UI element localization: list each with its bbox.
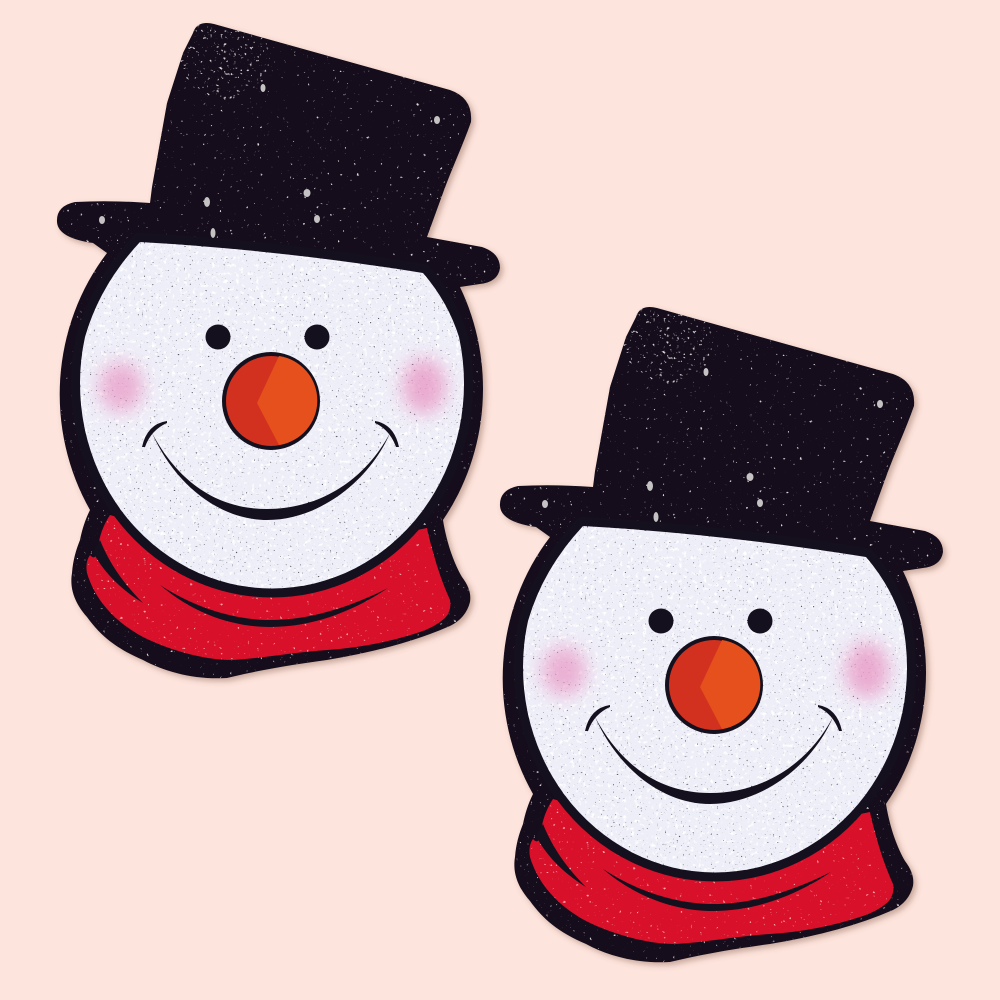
nose [222, 352, 320, 450]
smile [585, 705, 842, 804]
cheek: left [542, 646, 586, 696]
snowman pastie: lower right [483, 294, 963, 974]
smile [142, 421, 399, 520]
cheek: right [402, 358, 446, 414]
eye: left [206, 324, 230, 350]
white glitter head [513, 519, 913, 879]
white glitter head [70, 235, 470, 595]
eye: right [304, 324, 330, 350]
nose [665, 636, 763, 734]
red scarf [529, 799, 894, 944]
snowman pastie: upper left [40, 10, 520, 690]
eye: left [648, 608, 674, 634]
eye: right [748, 608, 772, 634]
cheek: left [99, 362, 143, 412]
black glitter outline and top hat [40, 10, 520, 690]
black glitter outline and top hat [483, 294, 963, 974]
red scarf [86, 515, 450, 660]
cheek: right [845, 642, 889, 698]
